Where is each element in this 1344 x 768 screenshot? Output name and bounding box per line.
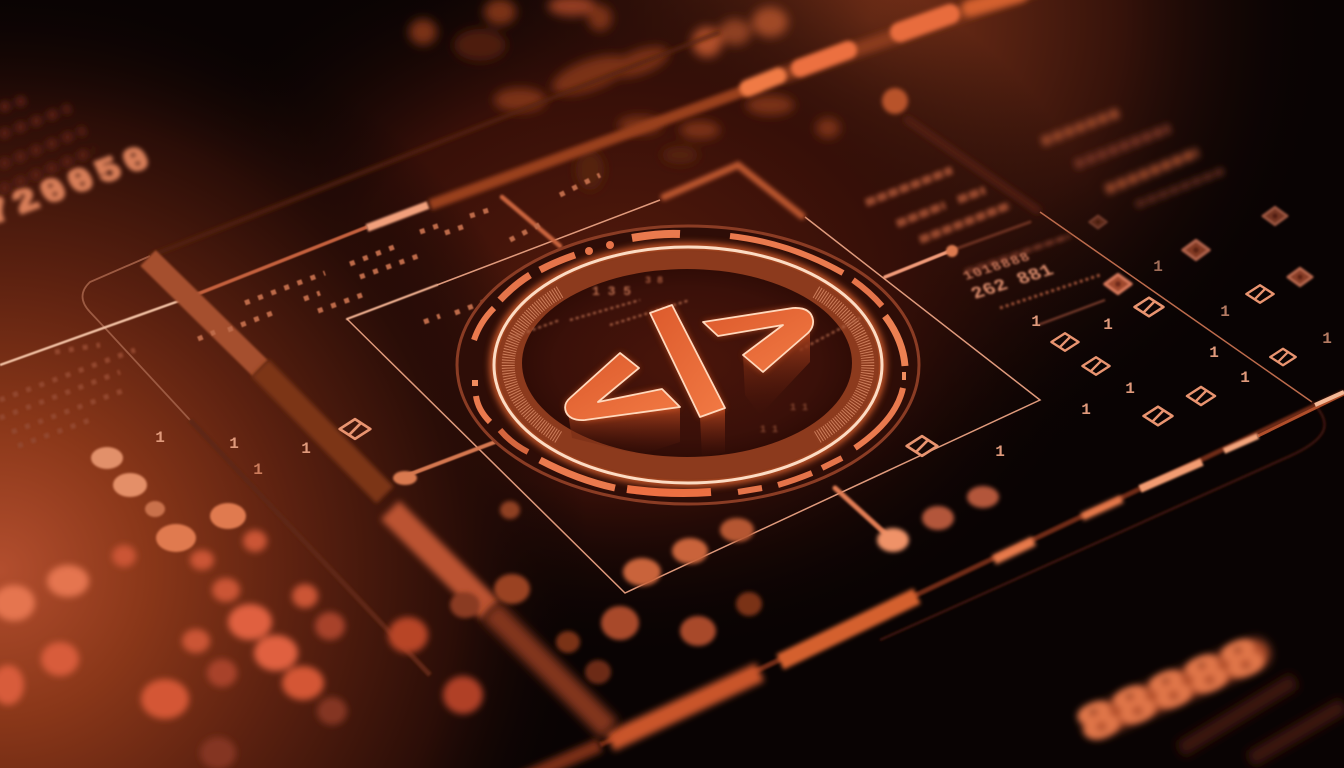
small digits inside the disc: 1 3 5 xyxy=(592,284,631,299)
blurred orange dots, bottom left xyxy=(0,447,483,768)
main frame line, lower left segment xyxy=(0,205,428,365)
glow under bright ring xyxy=(494,247,882,483)
top highlighted frame line xyxy=(430,0,1040,205)
glowing lower frame line with highlight segments xyxy=(520,392,1344,768)
digit one markers: 1 xyxy=(1209,344,1219,362)
diagonal translucent bar xyxy=(148,258,610,730)
glyph extrusion xyxy=(568,330,810,458)
digit one markers: 1 xyxy=(995,443,1005,461)
digit one markers: 1 xyxy=(301,440,311,458)
blurred data rows at the top xyxy=(409,0,840,190)
digit one markers: 1 xyxy=(1081,401,1091,419)
digit one markers: 1 xyxy=(1322,330,1332,348)
digit one markers: 1 xyxy=(155,429,165,447)
greater-than chevron xyxy=(703,308,813,372)
glyph glow xyxy=(565,305,813,420)
small digits inside the disc: 1 1 xyxy=(760,425,778,436)
digit one markers: 1 xyxy=(229,435,239,453)
digit one markers: 1 xyxy=(1240,369,1250,387)
connector lines xyxy=(347,165,1030,536)
blurred data rows, top right xyxy=(1042,112,1225,205)
radial tick band, sides only xyxy=(508,292,868,438)
digit one markers xyxy=(155,258,1332,479)
less-than chevron xyxy=(565,353,680,420)
digit one markers: 1 xyxy=(1153,258,1163,276)
small data squares on the panel xyxy=(198,175,600,339)
inner diamond panel outline xyxy=(347,200,1040,593)
blurred data rows, right of center xyxy=(866,170,1070,272)
band inside bright ring xyxy=(498,251,878,479)
blurred digit readout, bottom right: 88888 xyxy=(1069,630,1275,755)
digit one markers: 1 xyxy=(1031,313,1041,331)
small digits inside the disc: 1 1 xyxy=(790,403,808,414)
outer thin ring xyxy=(457,226,919,504)
data rows, far left xyxy=(0,345,135,446)
small data block with digits xyxy=(960,250,1105,325)
diamond markers xyxy=(340,207,1312,456)
digit one markers: 1 xyxy=(1125,380,1135,398)
digit one markers: 1 xyxy=(1103,316,1113,334)
segmented ring xyxy=(474,234,906,493)
circular emblem xyxy=(457,226,919,504)
small data block with digits: 1018888 xyxy=(960,250,1034,284)
digit one markers: 1 xyxy=(1220,303,1230,321)
dark disc xyxy=(522,269,852,457)
small digits inside the disc xyxy=(510,276,860,436)
small data block with digits: 262 881 xyxy=(967,261,1058,304)
orange dots along the panel's lower edge xyxy=(450,486,999,684)
slash xyxy=(650,305,725,417)
code symbol xyxy=(565,305,813,458)
outer interface frame xyxy=(82,32,1324,675)
small digits inside the disc: 3 8 xyxy=(645,276,663,287)
bright ring xyxy=(494,247,882,483)
digit one markers: 1 xyxy=(253,461,263,479)
